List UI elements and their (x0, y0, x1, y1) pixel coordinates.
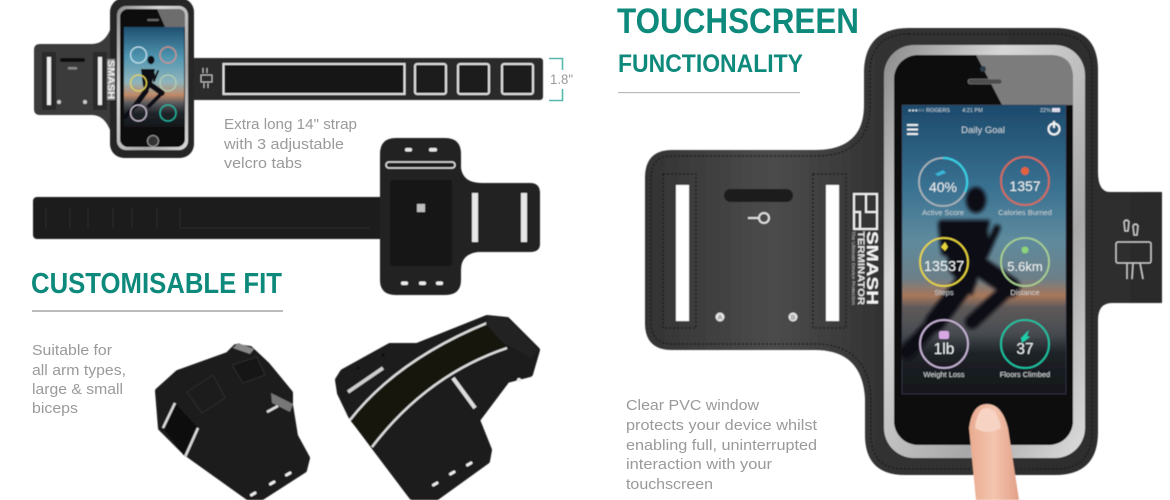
left wing (34, 30, 110, 130)
dimension bracket (549, 58, 573, 100)
slot stitching (663, 174, 696, 328)
strap seams (46, 208, 370, 228)
metallic strap ends (233, 343, 254, 354)
brand second line: TERMINATOR (856, 231, 866, 306)
text: fit description: Suitable for (32, 343, 112, 359)
wing slots (472, 193, 478, 242)
marker B: B (791, 314, 795, 322)
icon: power (1048, 121, 1060, 134)
velcro long panel (224, 64, 404, 94)
window trim (117, 6, 188, 150)
inner pocket (390, 180, 452, 266)
stat: distance: Distance (1010, 288, 1040, 297)
text: fit description: all arm types, (32, 363, 126, 379)
stat: weight loss (920, 320, 968, 379)
stat: active score: 40% (929, 179, 957, 195)
brand logo (851, 194, 880, 306)
top bar slot (386, 162, 455, 168)
bottom holes (434, 463, 471, 485)
home button (148, 136, 158, 146)
stat: floors climbed: Floors Climbed (1000, 370, 1050, 379)
phone (120, 9, 185, 147)
top holes (405, 148, 412, 152)
runner silhouette (907, 187, 1010, 352)
text: touchscreen description: enabling full, uninterrupted (626, 438, 817, 454)
strap care icon (201, 68, 212, 88)
text: touchscreen description: Clear PVC window (626, 398, 760, 414)
bracket lines (549, 58, 562, 100)
strap (185, 58, 543, 100)
small holes (356, 366, 360, 370)
folded body (338, 318, 537, 497)
left slot (676, 185, 689, 321)
phone glare (157, 9, 185, 27)
velcro tab 3 (502, 64, 533, 94)
brand subtitle: The Ultimate Device Protection (851, 231, 856, 306)
heading line 2: FUNCTIONALITY (618, 50, 803, 78)
camera (980, 66, 986, 72)
pocket logo (417, 204, 425, 212)
text: strap description: with 3 adjustable (223, 137, 344, 153)
back body (380, 138, 540, 295)
stat: steps: Steps (934, 288, 954, 297)
product: front armband with strap (34, 0, 543, 158)
slots (453, 378, 475, 408)
stat: floors climbed (1000, 320, 1050, 379)
stat: calories burned (998, 157, 1052, 217)
left slots (47, 57, 51, 105)
product: back of armband (33, 138, 540, 295)
finger (969, 404, 1019, 500)
side slot (267, 406, 278, 412)
velcro tab 2 (458, 64, 489, 94)
brand name: SMASH (863, 231, 880, 305)
bottom holes (252, 473, 290, 495)
stat: calories burned: Calories Burned (998, 208, 1052, 217)
app screen: 22% (1040, 108, 1051, 114)
key pocket slit (724, 189, 793, 202)
slot surrounds (42, 52, 107, 110)
armband body (645, 28, 1162, 475)
phone holder (110, 0, 194, 158)
heading line 1: TOUCHSCREEN (617, 2, 859, 41)
app title: Daily Goal (961, 125, 1005, 136)
text: fit description: biceps (32, 401, 78, 417)
screen background (902, 105, 1066, 394)
product: large armband (645, 28, 1162, 500)
earpiece (147, 19, 159, 21)
bottom holes (401, 282, 408, 285)
width value: 1.8" (550, 71, 573, 87)
window trim (884, 45, 1085, 458)
stat: active score (919, 158, 967, 217)
stat: weight loss: 1lb (934, 341, 954, 358)
stat: distance: 5.6km (1007, 259, 1043, 274)
heading: touchscreen functionality (617, 2, 859, 78)
text: touchscreen description: interaction with your (626, 457, 772, 473)
runner silhouette small (125, 56, 162, 117)
text: strap description: velcro tabs (224, 156, 302, 172)
logo square (854, 194, 877, 229)
icon: earphones in pouch (1116, 220, 1151, 279)
icon: key (748, 213, 769, 223)
small stat rings (130, 47, 176, 121)
heading: customisable fit: CUSTOMISABLE FIT (31, 268, 282, 300)
velcro tab 1 (415, 64, 446, 94)
earpiece (968, 79, 1002, 84)
text: fit description: large & small (32, 382, 123, 398)
stat: distance (1001, 238, 1049, 297)
side band dark (163, 403, 198, 457)
phone (894, 55, 1073, 445)
stat: steps (920, 238, 968, 297)
right slot (826, 185, 839, 321)
stat: steps: 13537 (924, 259, 964, 275)
fingernail (975, 408, 1001, 432)
key pocket slit (60, 58, 85, 62)
phone screen (124, 27, 184, 127)
folded body (158, 347, 307, 497)
strap loop (486, 316, 538, 358)
app screen (902, 105, 1066, 394)
stat: weight loss: Weight Loss (923, 370, 965, 379)
finger shape (969, 404, 1019, 500)
text: strap description: Extra long 14" strap (224, 117, 357, 133)
stat: floors climbed: 37 (1016, 341, 1034, 358)
stitching (651, 34, 1092, 469)
stat: active score: Active Score (922, 208, 964, 217)
reflective stripes (350, 323, 507, 447)
product: folded armband left (158, 343, 307, 497)
velcro band (350, 323, 507, 447)
text: touchscreen description: touchscreen (626, 477, 713, 493)
icon: menu (907, 125, 918, 134)
status bar: ●●●○○ ROGERS 4:21 PM (908, 108, 983, 114)
text: touchscreen description: protects your device whilst (626, 418, 817, 434)
back strap (33, 197, 388, 239)
phone glare (976, 55, 1073, 105)
velcro squares (187, 375, 225, 413)
brand block: SMASH (105, 60, 116, 99)
stat: calories burned: 1357 (1009, 178, 1041, 194)
marker B (788, 312, 798, 322)
product: folded armband right (338, 316, 538, 497)
reflective stripes (163, 403, 198, 457)
marker A (716, 312, 724, 322)
marker A: A (718, 314, 723, 322)
